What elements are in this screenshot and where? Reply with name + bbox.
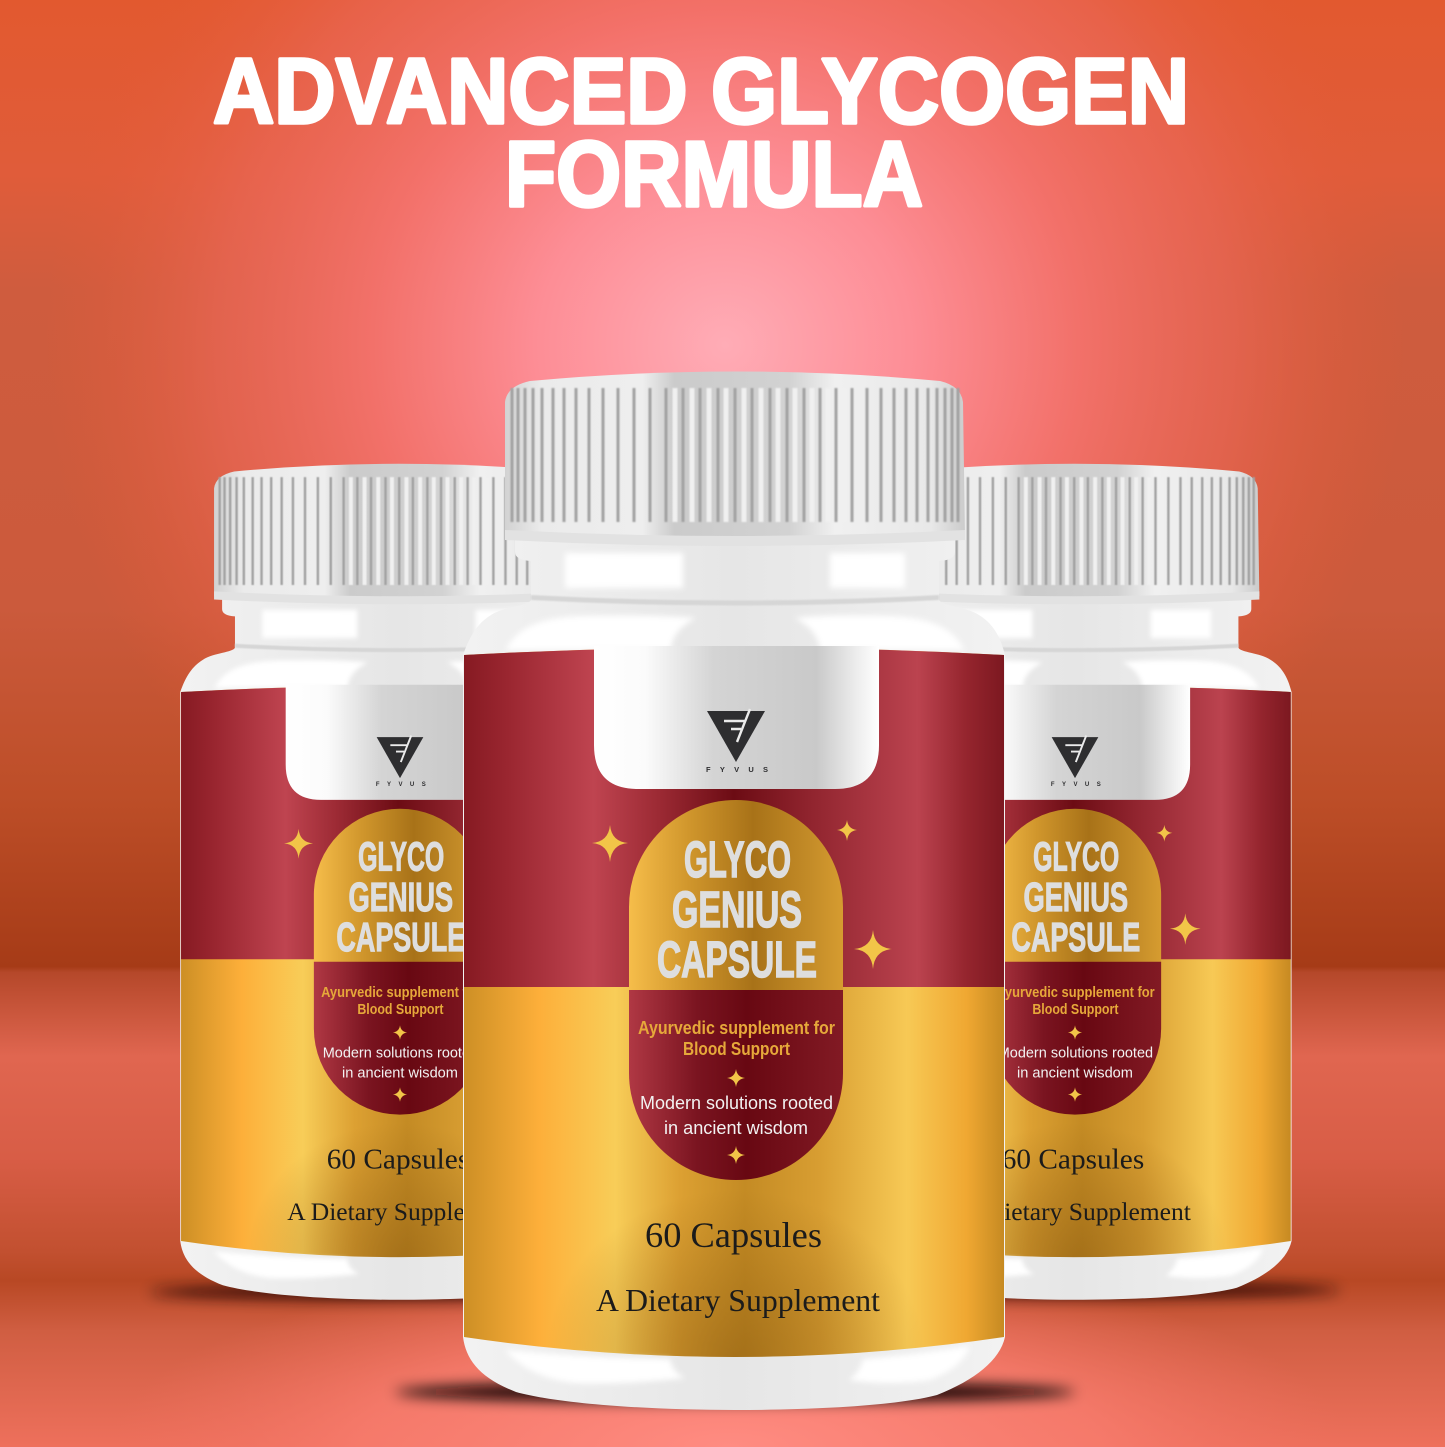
left bottle: GENIUS [348,874,453,920]
cap ridges [512,388,958,522]
left bottle: Ayurvedic supplement for [321,985,480,1001]
product name: GLYCO [684,831,791,888]
product name: GENIUS [672,881,802,938]
logo tab [594,646,879,789]
floor shadow: center bottle [395,1382,1075,1402]
product descriptor: Ayurvedic supplement for [638,1018,835,1038]
right bottle [855,464,1292,1300]
capsule count: 60 Capsules [645,1215,822,1255]
right bottle: Modern solutions rooted [998,1045,1153,1061]
left bottle: Blood Support [357,1002,444,1018]
left bottle: FYVUS [376,782,426,788]
cap lower lip [505,530,965,546]
neck highlights [565,553,905,588]
title: ADVANCED GLYCOGEN [213,39,1189,143]
tagline: Modern solutions rooted [640,1093,833,1113]
center bottle [463,372,1005,1410]
product descriptor [638,1018,835,1059]
product descriptor: Blood Support [683,1039,790,1059]
right bottle: FYVUS [1051,782,1101,788]
neck shadow line [531,595,939,606]
label: lower shading [464,1190,1004,1357]
pill: gold top [629,800,843,990]
shoulder highlights [506,615,964,650]
left bottle: A Dietary Supplement [287,1197,516,1226]
right bottle: GENIUS [1023,874,1128,920]
title: FORMULA [505,122,923,226]
label: red upper band [464,648,1004,987]
floor shadow: right bottle [830,1282,1340,1298]
left bottle: Modern solutions rooted [323,1045,478,1061]
base highlights [505,1346,970,1383]
pill: red bottom [629,990,843,1180]
supplement line: A Dietary Supplement [596,1282,880,1318]
right bottle: A Dietary Supplement [962,1197,1191,1226]
title [213,39,1189,226]
logo: FYVUS [706,709,768,774]
tagline: in ancient wisdom [664,1118,808,1138]
cap [505,372,965,543]
floor shadow: left bottle [150,1284,650,1300]
product name: CAPSULE [657,931,817,988]
tagline [640,1093,833,1138]
label: gold lower band [464,648,1004,1357]
left bottle: in ancient wisdom [342,1066,458,1082]
icon: sparkles [592,820,892,1164]
right bottle: Blood Support [1032,1002,1119,1018]
right bottle: 60 Capsules [1002,1144,1144,1176]
right bottle: GLYCO [1033,834,1119,880]
right bottle: in ancient wisdom [1017,1066,1133,1082]
right bottle: Ayurvedic supplement for [996,985,1155,1001]
logo: FYVUS: FYVUS [706,765,768,774]
product name [657,831,817,988]
bottle body [463,530,1005,1410]
left bottle: GLYCO [358,834,444,880]
right bottle: CAPSULE [1011,914,1140,960]
left bottle [180,464,617,1300]
left bottle: 60 Capsules [327,1144,469,1176]
left bottle: CAPSULE [336,914,465,960]
